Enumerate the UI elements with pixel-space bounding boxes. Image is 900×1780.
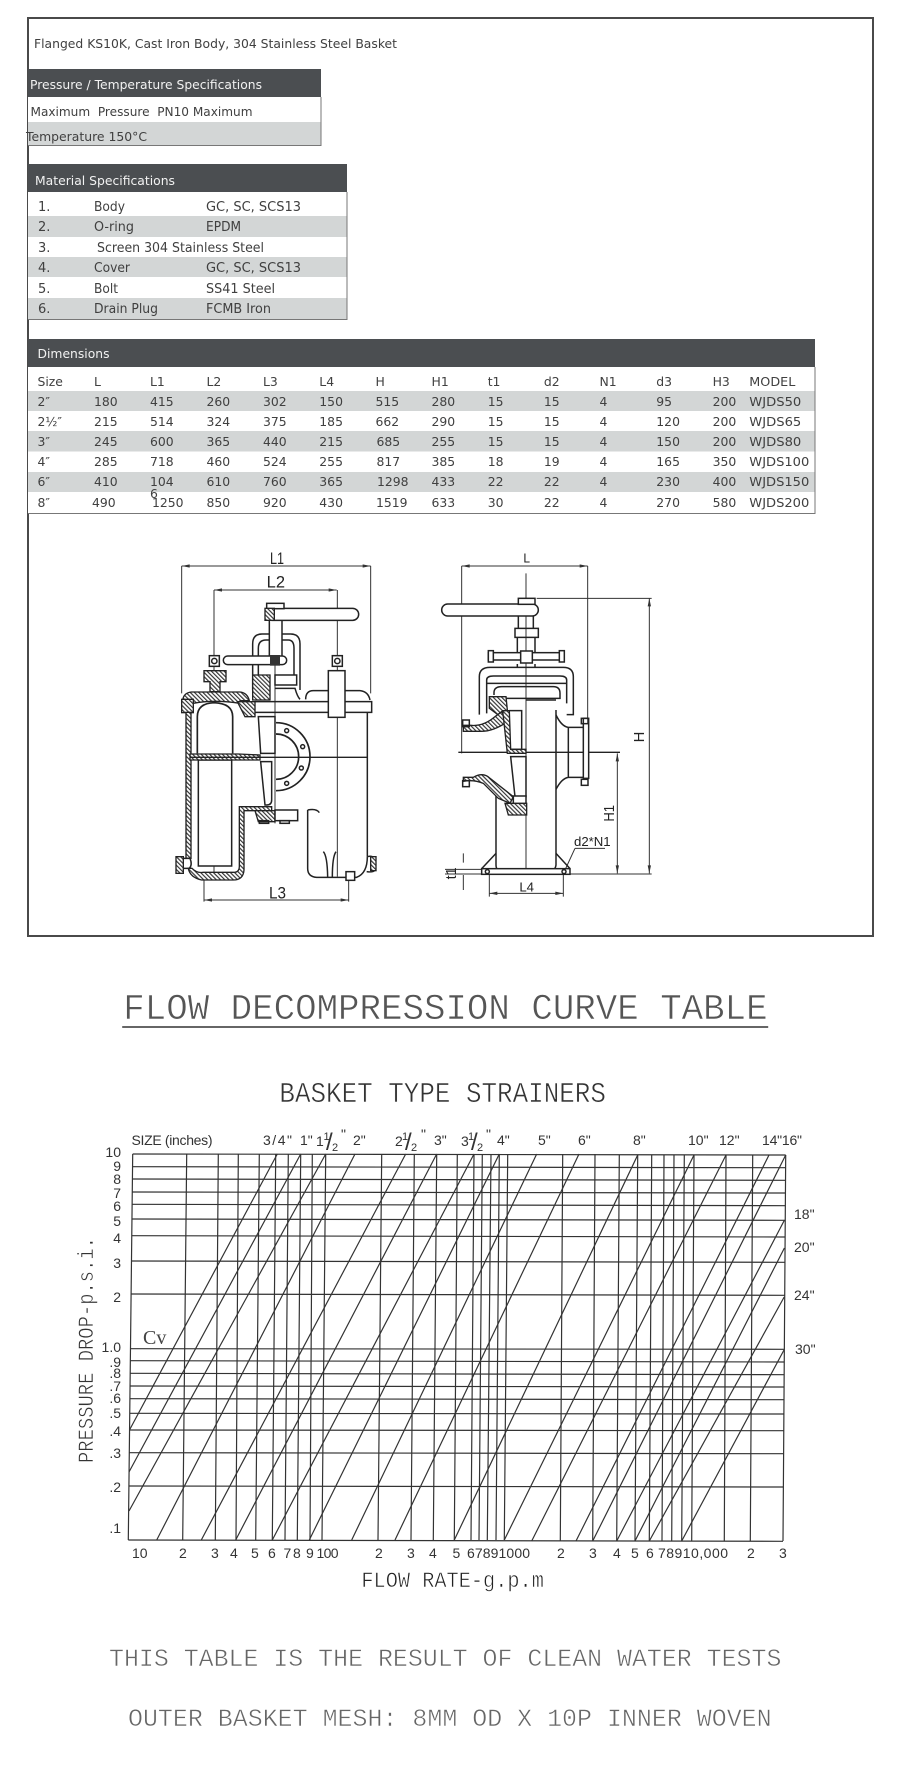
panel: dimensions table: 150 [319,394,343,409]
x axis tick labels [132,1545,787,1561]
x axis tick labels: 3 [211,1545,219,1561]
panel: material specifications [28,164,347,320]
pipe size labels: 1" [300,1132,313,1148]
pipe size labels: SIZE (inches) [132,1132,212,1148]
panel: material specifications: Bolt [94,282,118,297]
x axis tick labels: 3 [589,1545,597,1561]
panel: dimensions table: 270 [656,495,680,510]
panel: dimensions table: 22 [488,474,503,489]
x axis tick labels: 4 [613,1545,621,1561]
panel: dimensions table: 460 [206,454,230,469]
diagram: strainer front section view [176,549,376,902]
note: outer basket mesh: OUTER BASKET MESH: 8MM OD X 10P INNER WOVEN [128,1705,772,1734]
y axis tick labels: .4 [109,1423,121,1439]
panel: dimensions table: 718 [150,454,174,469]
x axis tick labels: 67891000 [467,1545,530,1561]
panel: dimensions table: 662 [376,414,399,429]
diagram: strainer side section view: t1 [444,867,460,879]
panel: material specifications: GC, SC, SCS13 [206,200,301,215]
y axis tick labels [102,1144,121,1536]
panel: dimensions table: 245 [94,434,118,449]
panel: dimensions table: WJDS150 [749,474,809,489]
panel: dimensions table: 185 [319,414,343,429]
pipe size labels: 3" [434,1132,447,1148]
pipe size labels: 1 [316,1133,324,1149]
diagram: strainer front section view: L2 [267,572,285,591]
y axis tick labels: .6 [109,1390,121,1406]
panel: dimensions table: 415 [150,394,174,409]
panel: dimensions table: 4 [600,414,608,429]
panel: dimensions table: 15 [488,434,503,449]
pipe size labels: 20" [794,1239,815,1255]
panel: dimensions table: 200 [713,434,736,449]
panel: dimensions table: 524 [263,454,287,469]
y axis tick labels: .5 [109,1405,121,1421]
pipe size labels: 2 [395,1133,403,1149]
pipe size labels: 1 [468,1131,474,1143]
pipe size labels: 8" [633,1132,646,1148]
y axis tick labels: .2 [109,1479,121,1495]
panel: dimensions table: 180 [94,394,118,409]
panel: dimensions table: 433 [432,474,455,489]
product description heading: Flanged KS10K, Cast Iron Body, 304 Stainless Steel Basket [34,36,397,51]
pipe size labels: 6" [578,1132,591,1148]
x axis tick labels: 5 [452,1545,460,1561]
panel: dimensions table: N1 [600,374,617,389]
panel: material specifications: 4. [38,261,50,276]
panel: dimensions table: 4″ [38,454,50,469]
panel: dimensions table: 230 [656,474,680,489]
panel: dimensions table [28,339,815,514]
panel: material specifications: 3. [38,241,50,256]
panel: dimensions table: 8″ [38,495,50,510]
panel: dimensions table: 610 [206,474,230,489]
x axis tick labels: 3 [779,1545,787,1561]
y axis title: PRESSURE DROP-p.s.i. [75,1237,100,1463]
pipe size labels: 24" [794,1287,815,1303]
panel: dimensions table: 30 [488,495,504,510]
x axis tick labels: 5 [631,1545,639,1561]
panel: dimensions table: 15 [544,434,560,449]
panel: dimensions table: H1 [432,374,449,389]
panel: dimensions table: WJDS80 [749,434,801,449]
panel: dimensions table: 255 [319,454,343,469]
y axis tick labels: .9 [109,1354,121,1370]
panel: material specifications: 1. [38,200,50,215]
cv label: Cv [143,1327,166,1349]
panel: dimensions table: L [94,374,101,389]
panel: pressure and temperature specifications: Temperature 150°C [25,129,147,144]
panel: dimensions table: t1 [488,374,500,389]
panel: material specifications: Body [94,200,125,215]
panel: pressure and temperature specifications: Pressure / Temperature Specifications [30,78,262,92]
diagram: strainer side section view: H1 [602,805,618,822]
panel: dimensions table: 850 [206,495,230,510]
panel: dimensions table: 633 [432,495,455,510]
diagram: strainer front section view: d3 [213,785,228,801]
panel: dimensions table: 260 [206,394,230,409]
panel: dimensions table: 6 [150,486,158,501]
panel: dimensions table: 290 [432,414,455,429]
pipe size labels: 4" [497,1132,510,1148]
panel: dimensions table: 302 [263,394,287,409]
y axis tick labels: 5 [113,1213,121,1229]
y axis tick labels: 4 [113,1230,121,1246]
panel: dimensions table: 350 [713,454,736,469]
x axis tick labels: 9 [306,1545,314,1561]
panel: dimensions table: 430 [319,495,343,510]
panel: dimensions table: 104 [150,474,174,489]
panel: dimensions table: 22 [544,495,560,510]
panel: dimensions table: H [376,374,385,389]
panel: dimensions table: L2 [206,374,221,389]
x axis tick labels: 10 [132,1545,148,1561]
panel: dimensions table: Dimensions [38,347,110,361]
note: clean water tests: THIS TABLE IS THE RESULT OF CLEAN WATER TESTS [109,1645,781,1674]
panel: dimensions table: WJDS65 [749,414,801,429]
chart: pressure drop versus flow rate [75,1126,816,1594]
panel: dimensions table: MODEL [749,374,795,389]
panel: dimensions table: L4 [319,374,334,389]
y axis tick labels: 7 [113,1185,121,1201]
panel: dimensions table: 580 [713,495,736,510]
panel: dimensions table: 4 [600,434,608,449]
panel: material specifications: 2. [38,220,50,235]
panel: dimensions table: Size [38,374,63,389]
panel: dimensions table: 4 [600,454,608,469]
x axis tick labels: 4 [230,1545,238,1561]
x axis tick labels: 78910,000 [658,1545,728,1561]
y axis tick labels: 1.0 [102,1339,121,1355]
panel: dimensions table: 490 [92,495,116,510]
panel: dimensions table: 514 [150,414,174,429]
panel: dimensions table: 400 [713,474,736,489]
panel: dimensions table: H3 [713,374,730,389]
panel: dimensions table: L3 [263,374,278,389]
pipe size labels: 3/4" [263,1132,292,1148]
pipe size labels: 10" [688,1132,709,1148]
panel: dimensions table: 4 [600,495,608,510]
pipe size labels: 1 [402,1131,408,1143]
pipe size labels: / [326,1129,333,1156]
panel: dimensions table: 324 [206,414,230,429]
panel: dimensions table: 22 [544,474,560,489]
panel: dimensions table: 215 [319,434,343,449]
panel: material specifications: Drain Plug [94,302,158,317]
panel: material specifications: O-ring [94,220,134,235]
pipe size labels: / [405,1129,412,1156]
panel: dimensions table: 2″ [38,394,50,409]
x axis title: FLOW RATE-g.p.m [361,1569,544,1594]
panel: dimensions table: L1 [150,374,165,389]
y axis tick labels: 8 [113,1171,121,1187]
panel: dimensions table: 440 [263,434,287,449]
x axis tick labels: 6 [268,1545,276,1561]
panel: dimensions table: 685 [376,434,400,449]
panel: dimensions table: 165 [656,454,680,469]
panel: dimensions table: 6″ [38,474,50,489]
y axis tick labels: 3 [113,1255,121,1271]
x axis tick labels: 2 [557,1545,565,1561]
panel: dimensions table: 817 [376,454,400,469]
panel: pressure and temperature specifications [25,69,321,146]
panel: dimensions table: 4 [600,474,608,489]
pipe size labels: 5" [538,1132,551,1148]
panel: dimensions table: 2½″ [38,414,62,429]
pipe size labels: 1 [324,1131,330,1143]
panel: dimensions table: 375 [263,414,287,429]
panel: dimensions table: 3″ [38,434,50,449]
pipe size labels: " [486,1126,491,1142]
panel: dimensions table: 19 [544,454,560,469]
diagram: strainer side section view: L [523,552,530,566]
panel: dimensions table: 920 [263,495,287,510]
panel: material specifications: SS41 Steel [206,282,275,297]
x axis tick labels: 7 [284,1545,292,1561]
panel: dimensions table: 1250 [152,495,184,510]
panel: dimensions table: 200 [713,394,736,409]
pipe size labels [132,1126,816,1357]
panel: dimensions table: 365 [319,474,343,489]
diagram: strainer side section view: H [632,732,648,742]
panel: dimensions table: 200 [713,414,736,429]
panel: dimensions table: 1519 [376,495,408,510]
panel: dimensions table: 150 [656,434,680,449]
diagram: strainer side section view [442,552,652,897]
panel: material specifications: Screen 304 Stainless Steel [97,241,264,256]
pipe size labels: 2" [353,1132,366,1148]
chart grid [128,1154,786,1541]
panel: dimensions table: 15 [544,414,560,429]
diagram: strainer front section view: L3 [269,883,286,902]
panel: dimensions table: 15 [488,394,503,409]
x axis tick labels: 2 [747,1545,755,1561]
pipe size labels: 30" [795,1341,816,1357]
x axis tick labels: 8 [293,1545,301,1561]
panel: dimensions table: d2 [544,374,560,389]
pipe size labels: 2 [411,1142,417,1154]
pipe size labels: / [471,1129,478,1156]
outer frame panel [28,18,873,936]
panel: material specifications: GC, SC, SCS13 [206,261,301,276]
x axis tick labels: 2 [179,1545,187,1561]
diagram: strainer side section view: d2*N1 [574,835,611,849]
panel: dimensions table: WJDS200 [749,495,809,510]
diagram: strainer front section view: H3 [198,806,210,821]
pipe size labels: " [341,1126,346,1142]
heading: flow decompression curve table: FLOW DECOMPRESSION CURVE TABLE [123,989,768,1030]
y axis tick labels: .3 [109,1445,121,1461]
panel: dimensions table: 385 [432,454,455,469]
panel: dimensions table: 15 [488,414,503,429]
panel: material specifications: 6. [38,302,50,317]
pipe size labels: 2 [332,1142,338,1154]
panel: dimensions table: 120 [656,414,680,429]
panel: dimensions table: 95 [656,394,672,409]
y axis tick labels: .8 [109,1365,121,1381]
panel: material specifications: EPDM [206,220,241,235]
y axis tick labels: 6 [113,1198,121,1214]
panel: dimensions table: 215 [94,414,118,429]
panel: dimensions table: d3 [656,374,672,389]
panel: material specifications: 5. [38,282,50,297]
panel: material specifications: Material Specifications [35,174,175,188]
x axis tick labels: 4 [429,1545,437,1561]
panel: dimensions table: 15 [544,394,560,409]
pipe size labels: 18" [794,1206,815,1222]
panel: dimensions table: 280 [432,394,455,409]
panel: dimensions table: 255 [432,434,455,449]
heading: basket type strainers: BASKET TYPE STRAINERS [279,1078,606,1111]
y axis tick labels: 9 [113,1158,121,1174]
panel: dimensions table: 515 [376,394,399,409]
y axis tick labels: 2 [113,1289,121,1305]
panel: material specifications: FCMB Iron [206,302,271,317]
panel: dimensions table: 285 [94,454,118,469]
y axis tick labels: 10 [105,1144,121,1160]
panel: dimensions table: 1298 [377,474,409,489]
pipe size labels: 14"16" [762,1132,802,1148]
x axis tick labels: 5 [251,1545,259,1561]
pipe size labels: 2 [477,1142,483,1154]
panel: dimensions table: 410 [94,474,118,489]
panel: dimensions table: 760 [263,474,287,489]
panel: material specifications: Cover [94,261,131,276]
pipe size labels: 12" [719,1132,740,1148]
x axis tick labels: 100 [316,1545,339,1561]
y axis tick labels: .1 [109,1520,121,1536]
panel: pressure and temperature specifications: Maximum Pressure PN10 Maximum [30,104,252,119]
panel: dimensions table: WJDS100 [749,454,809,469]
diagram: strainer side section view: L4 [519,881,534,895]
panel: dimensions table: 600 [150,434,174,449]
diagram: strainer front section view: L1 [270,549,284,568]
pipe size labels: " [421,1126,426,1142]
pipe size labels: 3 [461,1133,469,1149]
panel: dimensions table: 4 [600,394,608,409]
x axis tick labels: 3 [407,1545,415,1561]
x axis tick labels: 2 [375,1545,383,1561]
y axis tick labels: .7 [109,1378,121,1394]
x axis tick labels: 6 [646,1545,654,1561]
panel: dimensions table: 18 [488,454,504,469]
panel: dimensions table: WJDS50 [749,394,801,409]
panel: dimensions table: 365 [206,434,230,449]
